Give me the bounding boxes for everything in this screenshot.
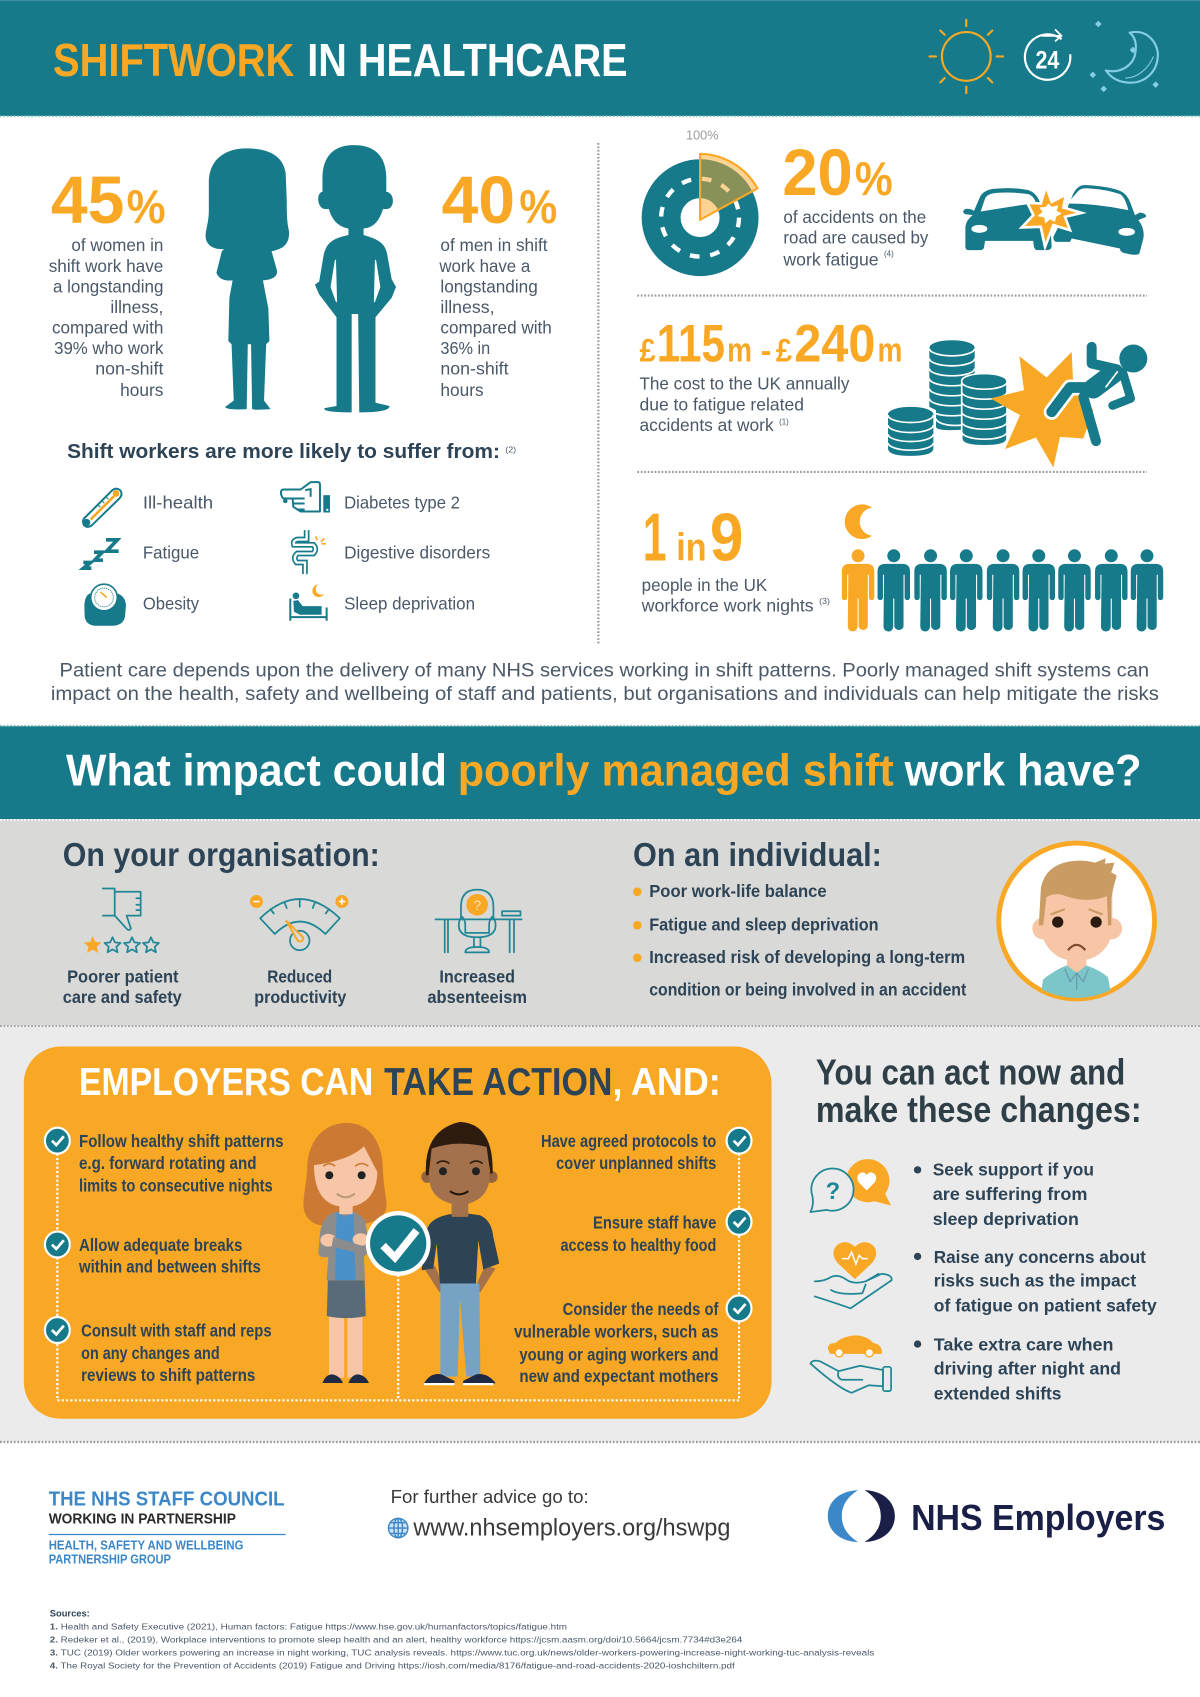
heading: employers can take action: TAKE ACTION	[384, 1061, 612, 1104]
chart: road donut 20 percent	[661, 128, 757, 257]
icon: productivity gauge	[250, 895, 348, 950]
panel: accident cost: accidents at work	[639, 415, 774, 435]
illustration: woman	[303, 1123, 387, 1383]
text block: seek support	[914, 1159, 1094, 1229]
divider line	[637, 295, 1147, 297]
icon: worried face portrait	[999, 843, 1155, 1001]
text block: sources: 3. TUC (2019) Older workers powering an increase in night working, TUC analysis reveals. https://www.tuc.org.uk/news/older-workers-powering-increase-night-working-tuc-analysis-reveals	[50, 1648, 875, 1658]
text: further advice link: For further advice go to:	[391, 1486, 589, 1507]
text block: employer actions left: e.g. forward rotating and	[79, 1153, 256, 1173]
text block: employer actions left	[78, 1131, 283, 1385]
panel: accident cost: m	[727, 332, 752, 370]
panel: accident cost: -	[761, 333, 772, 369]
text block: employer actions left: reviews to shift patterns	[81, 1365, 255, 1385]
text block: extra care: Take extra care when	[934, 1335, 1113, 1355]
text block: employer actions left: limits to consecutive nights	[79, 1176, 273, 1196]
icon: sleeping zzz	[83, 540, 119, 568]
text block: seek support: Seek support if you	[933, 1159, 1094, 1179]
label: sleep deprivation: Sleep deprivation	[344, 593, 475, 613]
text block: sources: 4. The Royal Society for the Prevention of Accidents (2019) Fatigue and Driving https://iosh.com/media/8176/fatigue-and-road-accidents-2020-ioshchiltern.pdf	[50, 1661, 735, 1671]
text block: employer actions left: on any changes and	[81, 1343, 220, 1363]
panel: men statistic	[438, 163, 557, 400]
icon: thumbs down with stars	[84, 889, 159, 953]
icon: explosion star	[991, 352, 1093, 468]
panel: 20 percent road accidents: work fatigue	[782, 249, 879, 269]
panel: accident cost: (1)	[779, 416, 789, 426]
logo: NHS staff council	[49, 1487, 286, 1567]
panel: men statistic: illness,	[440, 297, 494, 317]
text block: raise concerns: Raise any concerns about	[934, 1247, 1146, 1267]
label: reduced productivity	[254, 967, 347, 1007]
icon: speech bubbles	[810, 1159, 891, 1212]
text block: extra care: extended shifts	[934, 1383, 1061, 1403]
panel: accident cost	[639, 315, 902, 435]
panel: 20 percent road accidents: (4)	[884, 249, 894, 259]
icon: globe	[388, 1518, 408, 1538]
text block: employer actions right	[514, 1131, 719, 1386]
label: obesity: Obesity	[143, 593, 199, 613]
panel: action light band	[0, 1027, 1200, 1442]
icon: bed with moon	[290, 584, 327, 621]
icon: crescent moon	[845, 504, 872, 539]
text block: employer actions right: Consider the needs of	[563, 1299, 719, 1319]
panel: men statistic: compared with	[440, 317, 552, 337]
panel: accident cost: £	[639, 333, 656, 369]
heading: on your organisation: On your organisation:	[63, 837, 380, 874]
title: IN HEALTHCARE	[307, 34, 628, 86]
text block: raise concerns: of fatigue on patient safety	[934, 1296, 1157, 1316]
text block: sources	[50, 1609, 875, 1671]
panel: women statistic: 39% who work	[54, 338, 164, 358]
icon: intestines	[294, 530, 326, 574]
label: reduced productivity: Reduced	[267, 967, 332, 987]
logo: NHS staff council: WORKING IN PARTNERSHIP	[49, 1511, 236, 1528]
text block: introduction paragraph: Patient care depends upon the delivery of many NHS services working in shift patterns. Poorly managed shift systems can	[60, 659, 1149, 681]
panel: women statistic: %	[127, 181, 166, 234]
divider line	[637, 471, 1147, 473]
illustration: man	[421, 1122, 499, 1384]
text: further advice link: www.nhsemployers.org/hswpg	[412, 1515, 730, 1542]
panel: 20 percent road accidents: of accidents on the	[783, 207, 926, 227]
text block: employer actions right: Ensure staff have	[593, 1212, 717, 1232]
list: individual impacts: Fatigue and sleep deprivation	[649, 915, 879, 935]
label: reduced productivity: productivity	[254, 987, 347, 1007]
text block: raise concerns	[914, 1247, 1157, 1316]
text block: employer actions right: young or aging workers and	[519, 1344, 718, 1364]
panel: women statistic: illness,	[110, 297, 163, 317]
panel: women statistic: hours	[120, 380, 164, 400]
heading: you can act now: make these changes:	[816, 1090, 1142, 1130]
panel: men statistic: hours	[440, 380, 484, 400]
icon: falling person	[1052, 345, 1147, 441]
heading: shift workers conditions: (2)	[505, 444, 516, 454]
panel: accident cost: 240	[794, 315, 875, 374]
chart: road donut 20 percent: 100%	[686, 128, 719, 143]
icon: 24 hour clock	[1025, 29, 1070, 80]
chart: nine people pictogram	[842, 549, 1163, 632]
title	[53, 34, 628, 86]
panel: accident cost: The cost to the UK annually	[639, 374, 850, 394]
panel: women statistic: 45	[51, 163, 124, 238]
label: poorer patient care: Poorer patient	[67, 967, 179, 987]
label: fatigue: Fatigue	[143, 543, 199, 563]
heading: on an individual: On an individual:	[633, 837, 882, 874]
icon: speech bubbles: ?	[826, 1178, 840, 1205]
label: increased absenteeism: absenteeism	[427, 987, 527, 1007]
label: diabetes: Diabetes type 2	[344, 493, 460, 513]
panel: one in nine: (3)	[819, 596, 830, 606]
panel: 20 percent road accidents: 20	[782, 135, 853, 209]
text block: employer actions left: Allow adequate breaks	[79, 1235, 242, 1255]
text: further advice link	[388, 1486, 730, 1542]
icons: left check marks	[45, 1128, 70, 1343]
list: individual impacts: condition or being involved in an accident	[649, 980, 966, 1000]
text block: sources: 2. Redeker et al., (2019), Workplace interventions to promote sleep health and an alert, healthy workforce https://jcsm.aasm.org/doi/10.5664/jcsm.7734#d3e264	[50, 1635, 742, 1645]
icon: central check badge	[366, 1211, 431, 1276]
panel: women statistic: of women in	[71, 235, 163, 255]
text block: employer actions right: cover unplanned shifts	[556, 1153, 716, 1173]
heading: you can act now	[816, 1052, 1142, 1130]
label: ill-health: Ill-health	[143, 493, 213, 513]
panel: men statistic: work have a	[438, 256, 531, 276]
panel: one in nine	[641, 500, 830, 616]
vertical divider	[597, 143, 599, 644]
banner: what impact: poorly managed shift	[458, 747, 894, 796]
panel: women statistic: shift work have	[49, 256, 163, 276]
list: individual impacts: Increased risk of developing a long-term	[649, 947, 965, 967]
logo: NHS staff council: THE NHS STAFF COUNCIL	[49, 1487, 285, 1510]
icon: coin stacks	[888, 340, 1007, 456]
panel: employers card	[24, 1047, 772, 1419]
label: digestive: Digestive disorders	[344, 543, 491, 563]
icon: sun	[929, 20, 1003, 93]
heading: employers can take action: EMPLOYERS CAN	[79, 1061, 373, 1104]
panel: one in nine: 1	[643, 500, 667, 576]
panel: women statistic	[49, 163, 166, 400]
panel: women statistic: compared with	[52, 317, 163, 337]
logo: NHS staff council: PARTNERSHIP GROUP	[49, 1553, 171, 1567]
icon: woman silhouette	[206, 148, 289, 410]
header band	[0, 0, 1200, 116]
list: individual impacts	[633, 881, 966, 1000]
heading: employers can take action	[79, 1061, 721, 1104]
icon: empty office chair: ?	[473, 897, 481, 913]
icon: heart in hand	[815, 1242, 892, 1308]
text block: extra care: driving after night and	[934, 1358, 1121, 1378]
panel: accident cost: 115	[657, 315, 725, 374]
text block: raise concerns: risks such as the impact	[934, 1271, 1136, 1291]
heading: employers can take action: , AND:	[612, 1061, 721, 1104]
panel: men statistic: longstanding	[440, 276, 538, 296]
icon: empty office chair	[436, 890, 522, 952]
panel: men statistic: of men in shift	[440, 235, 548, 255]
panel: accident cost: £	[776, 333, 792, 369]
panel: one in nine: people in the UK	[642, 575, 768, 595]
panel: 20 percent road accidents	[782, 135, 929, 269]
panel: one in nine: workforce work nights	[641, 596, 814, 616]
title: SHIFTWORK	[53, 34, 295, 86]
logo: NHS Employers: NHS Employers	[911, 1498, 1165, 1538]
icons: right check marks	[727, 1128, 751, 1321]
heading: you can act now: You can act now and	[816, 1052, 1125, 1092]
panel: men statistic: %	[519, 181, 557, 234]
text block: seek support: sleep deprivation	[933, 1209, 1079, 1229]
logo: NHS Employers	[828, 1490, 1165, 1542]
panel: accident cost: due to fatigue related	[639, 394, 804, 414]
icon: weighing scale	[84, 584, 126, 626]
text block: employer actions right: access to healthy food	[561, 1235, 716, 1255]
heading: shift workers conditions: Shift workers are more likely to suffer from:	[67, 441, 500, 463]
banner: what impact: What impact could	[66, 747, 447, 796]
icon: diabetes hand test	[281, 482, 330, 512]
text block: extra care	[914, 1335, 1121, 1403]
icon: car in hand	[810, 1335, 891, 1393]
text block: employer actions right: Have agreed protocols to	[541, 1131, 716, 1151]
text block: employer actions right: new and expectant mothers	[519, 1366, 718, 1386]
icon: thermometer	[83, 489, 122, 527]
panel: women statistic: non-shift	[95, 359, 164, 379]
label: poorer patient care: care and safety	[63, 987, 182, 1007]
panel: women statistic: a longstanding	[53, 276, 163, 296]
icon: moon and stars	[1090, 21, 1159, 92]
panel: accident cost: m	[878, 332, 902, 370]
icon: car crash	[963, 185, 1146, 255]
text block: employer actions right: vulnerable workers, such as	[514, 1322, 718, 1342]
panel: impact grey band	[0, 819, 1200, 1026]
banner: what impact	[0, 726, 1200, 819]
text block: sources: Sources:	[50, 1609, 90, 1619]
text block: introduction paragraph: impact on the health, safety and wellbeing of staff and patients, but organisations and individuals can help mitigate the risks	[51, 683, 1159, 705]
panel: one in nine: 9	[710, 500, 743, 576]
panel: one in nine: in	[676, 527, 707, 570]
list: individual impacts: Poor work-life balance	[649, 881, 827, 901]
panel: men statistic: non-shift	[440, 359, 509, 379]
icon: man silhouette	[315, 145, 396, 412]
text block: introduction paragraph	[51, 659, 1159, 705]
panel: men statistic: 36% in	[440, 338, 490, 358]
label: increased absenteeism: Increased	[439, 967, 515, 987]
logo: NHS staff council: HEALTH, SAFETY AND WELLBEING	[49, 1539, 243, 1553]
text block: employer actions left: within and between shifts	[78, 1257, 261, 1277]
panel: 20 percent road accidents: road are caused by	[783, 228, 929, 248]
label: increased absenteeism	[427, 967, 527, 1007]
text block: employer actions left: Consult with staff and reps	[81, 1321, 272, 1341]
text block: sources: 1. Health and Safety Executive (2021), Human factors: Fatigue https://www.hse.gov.uk/humanfactors/topics/fatigue.htm	[50, 1622, 567, 1632]
label: poorer patient care	[63, 967, 182, 1007]
panel: 20 percent road accidents: %	[855, 153, 893, 206]
text block: seek support: are suffering from	[933, 1184, 1087, 1204]
panel: men statistic: 40	[441, 163, 515, 238]
banner: what impact: work have?	[904, 747, 1142, 796]
icon: 24 hour clock: 24	[1036, 46, 1059, 74]
text block: employer actions left: Follow healthy shift patterns	[79, 1131, 283, 1151]
